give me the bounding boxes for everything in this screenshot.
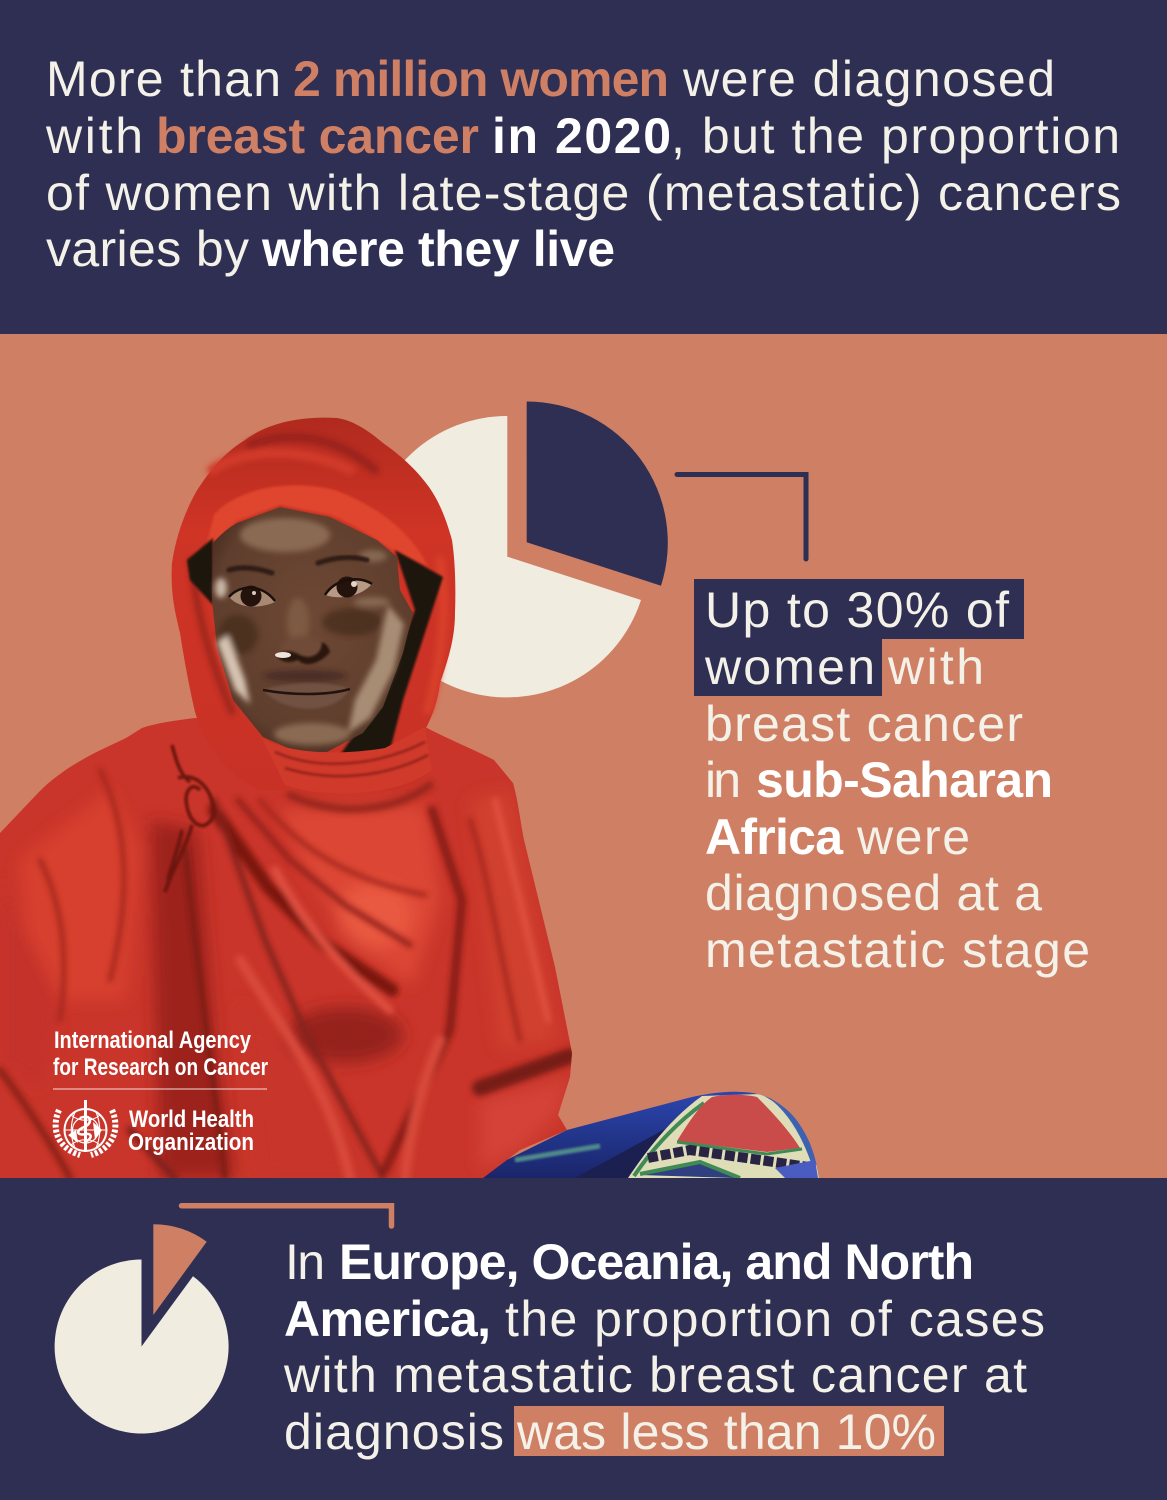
dark hair and shadow [187,538,443,755]
logo text: World Health Organization: Organization [128,1129,254,1156]
hood front band [205,485,428,566]
logo: IARC and WHO [53,1027,268,1156]
text block: Europe, Oceania and North America statement: Europe, Oceania, and North [339,1234,974,1290]
panel: top header background [0,0,1167,334]
highlight: salmon box behind was less than 10% [514,1406,944,1456]
icon: WHO emblem [56,1100,115,1155]
panel: middle salmon section [0,334,1167,1178]
hood [172,418,455,790]
pie slice: remaining 70 percent [366,416,641,697]
heading: headline statement [45,51,1121,277]
facial shading [215,518,404,745]
text block: Europe, Oceania and North America statement: was less than 10% [516,1404,936,1460]
logo text: International Agency for Research on Cancer: International Agency [54,1027,252,1054]
photo: woman in red headscarf [0,418,830,1180]
pie slice: remaining 90 percent [55,1260,229,1433]
text block: Europe, Oceania and North America statement [283,1234,1045,1460]
logo text: World Health Organization [128,1106,254,1156]
text block: Europe, Oceania and North America statement: America, [284,1291,491,1347]
eyebrows [229,558,367,573]
text block: Europe, Oceania and North America statement: with metastatic breast cancer at [283,1347,1027,1403]
heading: headline statement: of women with late-stage (metastatic) cancers [46,165,1121,221]
heading: headline statement: More than [46,51,281,107]
pie chart: sub-Saharan Africa 30 percent [366,401,668,697]
logo text: International Agency for Research on Cancer [53,1027,268,1081]
knot on shoulder [165,745,214,892]
body drape [0,700,600,1180]
face [212,507,413,752]
pie slice: 30 percent metastatic [527,401,668,586]
text block: Europe, Oceania and North America statement: diagnosis [284,1404,504,1460]
text block: sub-Saharan Africa statement: Up to 30% of [705,582,1009,638]
hood folds [192,437,444,712]
pie slice: 10 percent metastatic [153,1224,207,1315]
panel: bottom navy section [0,1178,1167,1500]
text block: sub-Saharan Africa statement: sub-Saharan [756,752,1053,808]
text block: sub-Saharan Africa statement: diagnosed at a [705,865,1042,921]
text block: sub-Saharan Africa statement: were [856,809,970,865]
pie chart: Europe, Oceania, North America under 10 percent [55,1224,229,1433]
text block: sub-Saharan Africa statement: breast cancer [705,696,1023,752]
text block: Europe, Oceania and North America statement: the proportion of cases [505,1291,1045,1347]
text block: sub-Saharan Africa statement: Africa [705,809,844,865]
heading: headline statement: , but the proportion [671,108,1120,164]
leg with patterned wrap [483,1092,819,1178]
heading: headline statement: 2 million women [293,51,669,107]
heading: headline statement: breast cancer [156,108,479,164]
heading: headline statement: were diagnosed [682,51,1055,107]
highlight: navy box behind Up to 30% of women [694,579,1024,696]
text block: sub-Saharan Africa statement: in [705,752,741,808]
connector arrow: pie to Europe text [182,1206,392,1226]
heading: headline statement: in 2020 [492,108,671,164]
connector arrow: pie to Africa text [677,474,806,559]
logo text: International Agency for Research on Cancer: for Research on Cancer [53,1054,268,1081]
text block: sub-Saharan Africa statement: metastatic stage [705,922,1090,978]
neck wrap [262,727,432,793]
heading: headline statement: with [45,108,143,164]
text block: sub-Saharan Africa statement: women [704,639,875,695]
eyes [229,576,372,607]
text block: sub-Saharan Africa statement [704,582,1090,978]
text block: sub-Saharan Africa statement: with [887,639,984,695]
mouth [263,683,350,709]
text block: Europe, Oceania and North America statement: In [285,1234,325,1290]
nose [275,642,330,664]
logo text: World Health Organization: World Health [129,1106,254,1133]
heading: headline statement: varies by [46,221,249,277]
heading: headline statement: where they live [261,221,615,277]
